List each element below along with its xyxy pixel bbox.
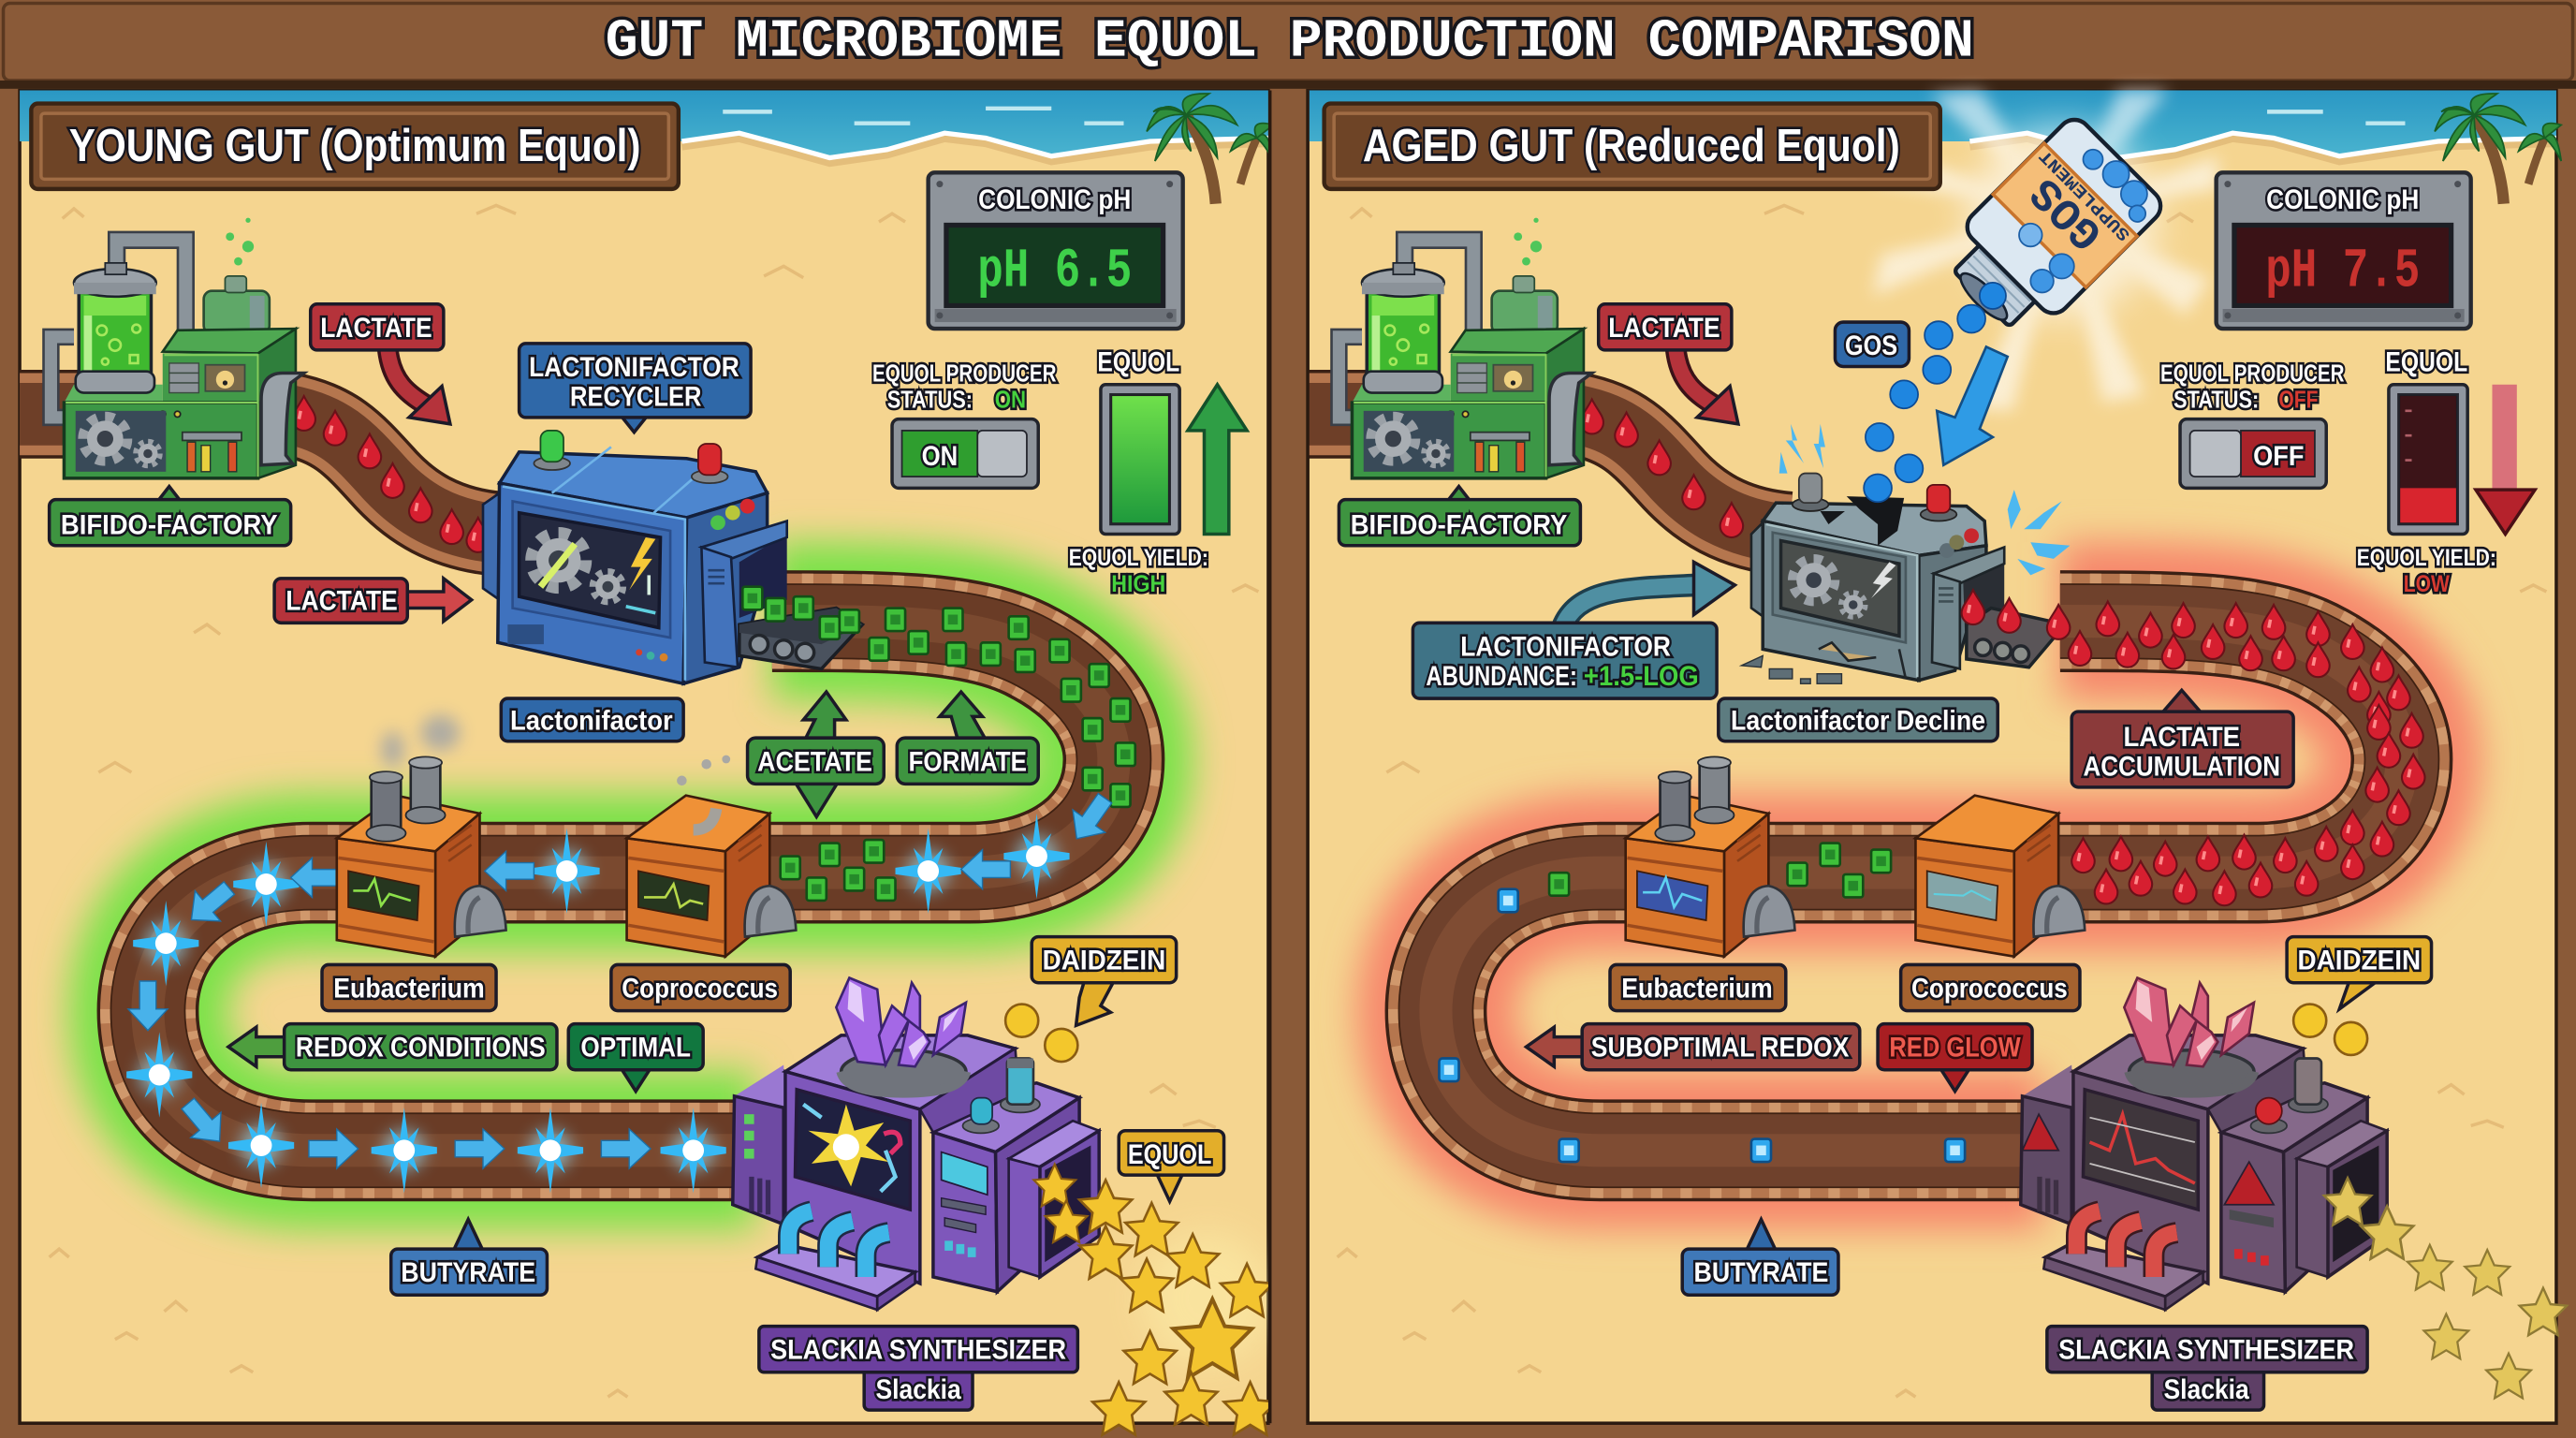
arrow: gos into machine bbox=[1937, 346, 2008, 465]
machine: damaged lactonifactor bbox=[1741, 474, 2065, 683]
equol yield high: EQUOL YIELD: bbox=[1069, 546, 1208, 571]
machine: bifido factory bbox=[1339, 218, 1592, 478]
machine: lactonifactor recycler bbox=[483, 431, 862, 683]
label: acetate: ACETATE bbox=[757, 746, 872, 777]
machine: slackia synthesizer failing bbox=[2021, 977, 2387, 1310]
gos supplement bottle bbox=[1930, 113, 2167, 350]
sparse particles bbox=[1439, 844, 1965, 1162]
equol gauge low: EQUOL bbox=[2385, 347, 2467, 378]
label: redox conditions bbox=[228, 1024, 557, 1070]
label: suboptimal redox: SUBOPTIMAL REDOX bbox=[1591, 1033, 1849, 1064]
frame center divider bbox=[1268, 91, 1310, 1423]
label: lactonifactor abundance with arrow: LACTONIFACTOR bbox=[1460, 631, 1671, 662]
ph meter young: COLONIC pH bbox=[978, 184, 1131, 215]
arrow: equol up bbox=[1188, 385, 1247, 535]
gos supplement bottle: GOS bbox=[2022, 167, 2114, 258]
equol producer status off: EQUOL PRODUCER bbox=[2160, 359, 2345, 387]
label: lactate with curved arrow bbox=[311, 304, 450, 424]
heading: young gut: YOUNG GUT (Optimum Equol) bbox=[69, 121, 640, 171]
title bar bbox=[0, 4, 2576, 89]
label: gos: GOS bbox=[1845, 330, 1897, 361]
heading: aged gut: AGED GUT (Reduced Equol) bbox=[1363, 121, 1900, 171]
lactate droplets upstream bbox=[1580, 400, 1743, 537]
label: bifido-factory: BIFIDO-FACTORY bbox=[61, 510, 278, 541]
machine: bifido factory bbox=[51, 218, 304, 478]
label: lactate accumulation: ACCUMULATION bbox=[2083, 752, 2280, 783]
title bar: GUT MICROBIOME EQUOL PRODUCTION COMPARISON bbox=[606, 13, 1974, 73]
label: butyrate bbox=[1682, 1220, 1838, 1295]
label: butyrate: BUTYRATE bbox=[1694, 1257, 1828, 1288]
equol yield low: EQUOL YIELD: bbox=[2357, 546, 2496, 571]
label: lactonifactor bbox=[501, 698, 683, 741]
ph meter aged: pH 7.5 bbox=[2265, 239, 2420, 302]
arrow: equol down bbox=[2476, 385, 2535, 535]
green particles bbox=[742, 587, 1135, 901]
label: coprococcus: Coprococcus bbox=[1911, 974, 2068, 1005]
label: equol output: EQUOL bbox=[1128, 1139, 1211, 1170]
equol producer status off bbox=[2160, 359, 2345, 488]
label: formate bbox=[897, 692, 1038, 784]
label: daidzein with coins bbox=[1005, 937, 1177, 1062]
heading: young gut bbox=[31, 104, 679, 189]
ph meter aged bbox=[2217, 172, 2471, 329]
panel: aged gut bbox=[1308, 91, 2567, 1423]
label: lactonifactor recycler: RECYCLER bbox=[570, 382, 701, 413]
label: daidzein with coins bbox=[2287, 937, 2432, 1055]
palm trees bbox=[2435, 94, 2561, 204]
gos supplement bottle: SUPPLEMENT bbox=[2036, 146, 2135, 244]
tube glow and winding gut bbox=[148, 622, 1114, 1151]
equol producer status off: STATUS: bbox=[2174, 385, 2259, 413]
label: butyrate: BUTYRATE bbox=[401, 1257, 535, 1288]
equol producer status off: OFF bbox=[2253, 441, 2305, 472]
label: eubacterium bbox=[1610, 964, 1786, 1011]
equol producer status on: ON bbox=[995, 385, 1026, 413]
equol producer status on bbox=[872, 359, 1057, 488]
palm trees bbox=[1147, 94, 1273, 204]
label: eubacterium bbox=[322, 964, 496, 1011]
equol gauge low bbox=[2385, 347, 2467, 535]
equol gauge high bbox=[1097, 347, 1179, 535]
label: red glow: RED GLOW bbox=[1889, 1033, 2021, 1064]
label: lactonifactor abundance with arrow: +1.5-LOG bbox=[1584, 661, 1699, 692]
machine: eubacterium bbox=[337, 715, 506, 957]
label: lactonifactor abundance with arrow bbox=[1412, 562, 1734, 698]
tube: factory to damaged recycler bbox=[1308, 414, 1789, 535]
label: eubacterium: Eubacterium bbox=[333, 974, 485, 1005]
label: bifido-factory bbox=[50, 487, 291, 546]
label: optimal bbox=[568, 1024, 703, 1092]
label: optimal: OPTIMAL bbox=[580, 1033, 691, 1064]
label: lactate with straight arrow: LACTATE bbox=[285, 585, 398, 616]
label: lactate with curved arrow bbox=[1599, 304, 1738, 424]
equol producer status on: EQUOL PRODUCER bbox=[872, 359, 1057, 387]
label: lactonifactor decline: Lactonifactor Decline bbox=[1731, 705, 1985, 736]
equol gauge high: EQUOL bbox=[1097, 347, 1179, 378]
label: lactonifactor: Lactonifactor bbox=[510, 705, 673, 736]
label: slackia synthesizer: Slackia bbox=[2163, 1374, 2249, 1405]
equol producer status on: STATUS: bbox=[887, 385, 973, 413]
equol yield low bbox=[2357, 546, 2496, 597]
panel: young gut bbox=[20, 91, 1277, 1434]
ph meter aged: COLONIC pH bbox=[2266, 184, 2419, 215]
label: lactonifactor abundance with arrow: ABUNDANCE: bbox=[1426, 661, 1577, 692]
label: coprococcus bbox=[1901, 964, 2080, 1011]
label: acetate bbox=[748, 692, 884, 816]
label: butyrate bbox=[391, 1220, 547, 1295]
muted equol stars bbox=[2324, 1178, 2567, 1398]
label: equol output bbox=[1119, 1131, 1224, 1201]
label: lactate accumulation bbox=[2071, 690, 2293, 787]
label: redox conditions: REDOX CONDITIONS bbox=[296, 1033, 546, 1064]
tube with red glow bbox=[1436, 622, 2402, 1151]
ph meter young bbox=[929, 172, 1183, 329]
label: bifido-factory bbox=[1339, 487, 1580, 546]
label: lactate with straight arrow bbox=[274, 579, 472, 623]
ph meter young: pH 6.5 bbox=[977, 239, 1132, 302]
lactate accumulation droplets bbox=[1962, 590, 2425, 905]
label: slackia synthesizer: SLACKIA SYNTHESIZER bbox=[2058, 1335, 2354, 1366]
machine: coprococcus aged bbox=[1915, 796, 2085, 957]
equol producer status on: ON bbox=[922, 441, 958, 472]
electrical sparks bbox=[1779, 424, 2070, 575]
label: lactate with curved arrow: LACTATE bbox=[320, 313, 432, 344]
equol yield high: HIGH bbox=[1111, 572, 1165, 597]
label: slackia synthesizer bbox=[759, 1327, 1077, 1410]
lactate droplets bbox=[292, 396, 490, 552]
tube: factory to recycler bbox=[20, 414, 501, 535]
machine: eubacterium aged bbox=[1626, 756, 1794, 957]
label: slackia synthesizer: Slackia bbox=[875, 1374, 961, 1405]
label: coprococcus: Coprococcus bbox=[622, 974, 778, 1005]
heading: aged gut bbox=[1325, 104, 1940, 189]
label: bifido-factory: BIFIDO-FACTORY bbox=[1351, 510, 1567, 541]
machine: coprococcus bbox=[627, 756, 796, 957]
label: lactate with curved arrow: LACTATE bbox=[1608, 313, 1720, 344]
label: daidzein with coins: DAIDZEIN bbox=[2298, 946, 2421, 976]
label: coprococcus bbox=[611, 964, 790, 1011]
butyrate sparks and flow arrows bbox=[126, 787, 1121, 1193]
equol stars bbox=[1033, 1165, 1277, 1434]
equol yield high bbox=[1069, 546, 1208, 597]
label: gos bbox=[1835, 322, 1909, 366]
label: red glow bbox=[1878, 1024, 2032, 1092]
equol yield low: LOW bbox=[2404, 572, 2451, 597]
label: lactonifactor recycler bbox=[520, 344, 751, 433]
equol producer status off: OFF bbox=[2278, 385, 2318, 413]
bottle light rays bbox=[1873, 91, 2217, 411]
gos pellets bbox=[1864, 283, 2006, 502]
label: eubacterium: Eubacterium bbox=[1621, 974, 1773, 1005]
label: suboptimal redox bbox=[1526, 1024, 1860, 1070]
machine: slackia synthesizer bbox=[733, 977, 1099, 1310]
label: formate: FORMATE bbox=[909, 746, 1027, 777]
label: slackia synthesizer bbox=[2047, 1327, 2367, 1410]
label: slackia synthesizer: SLACKIA SYNTHESIZER bbox=[770, 1335, 1066, 1366]
label: lactate accumulation: LACTATE bbox=[2123, 722, 2240, 753]
label: lactonifactor decline bbox=[1719, 698, 1998, 741]
label: lactonifactor recycler: LACTONIFACTOR bbox=[529, 352, 739, 383]
label: daidzein with coins: DAIDZEIN bbox=[1043, 946, 1165, 976]
